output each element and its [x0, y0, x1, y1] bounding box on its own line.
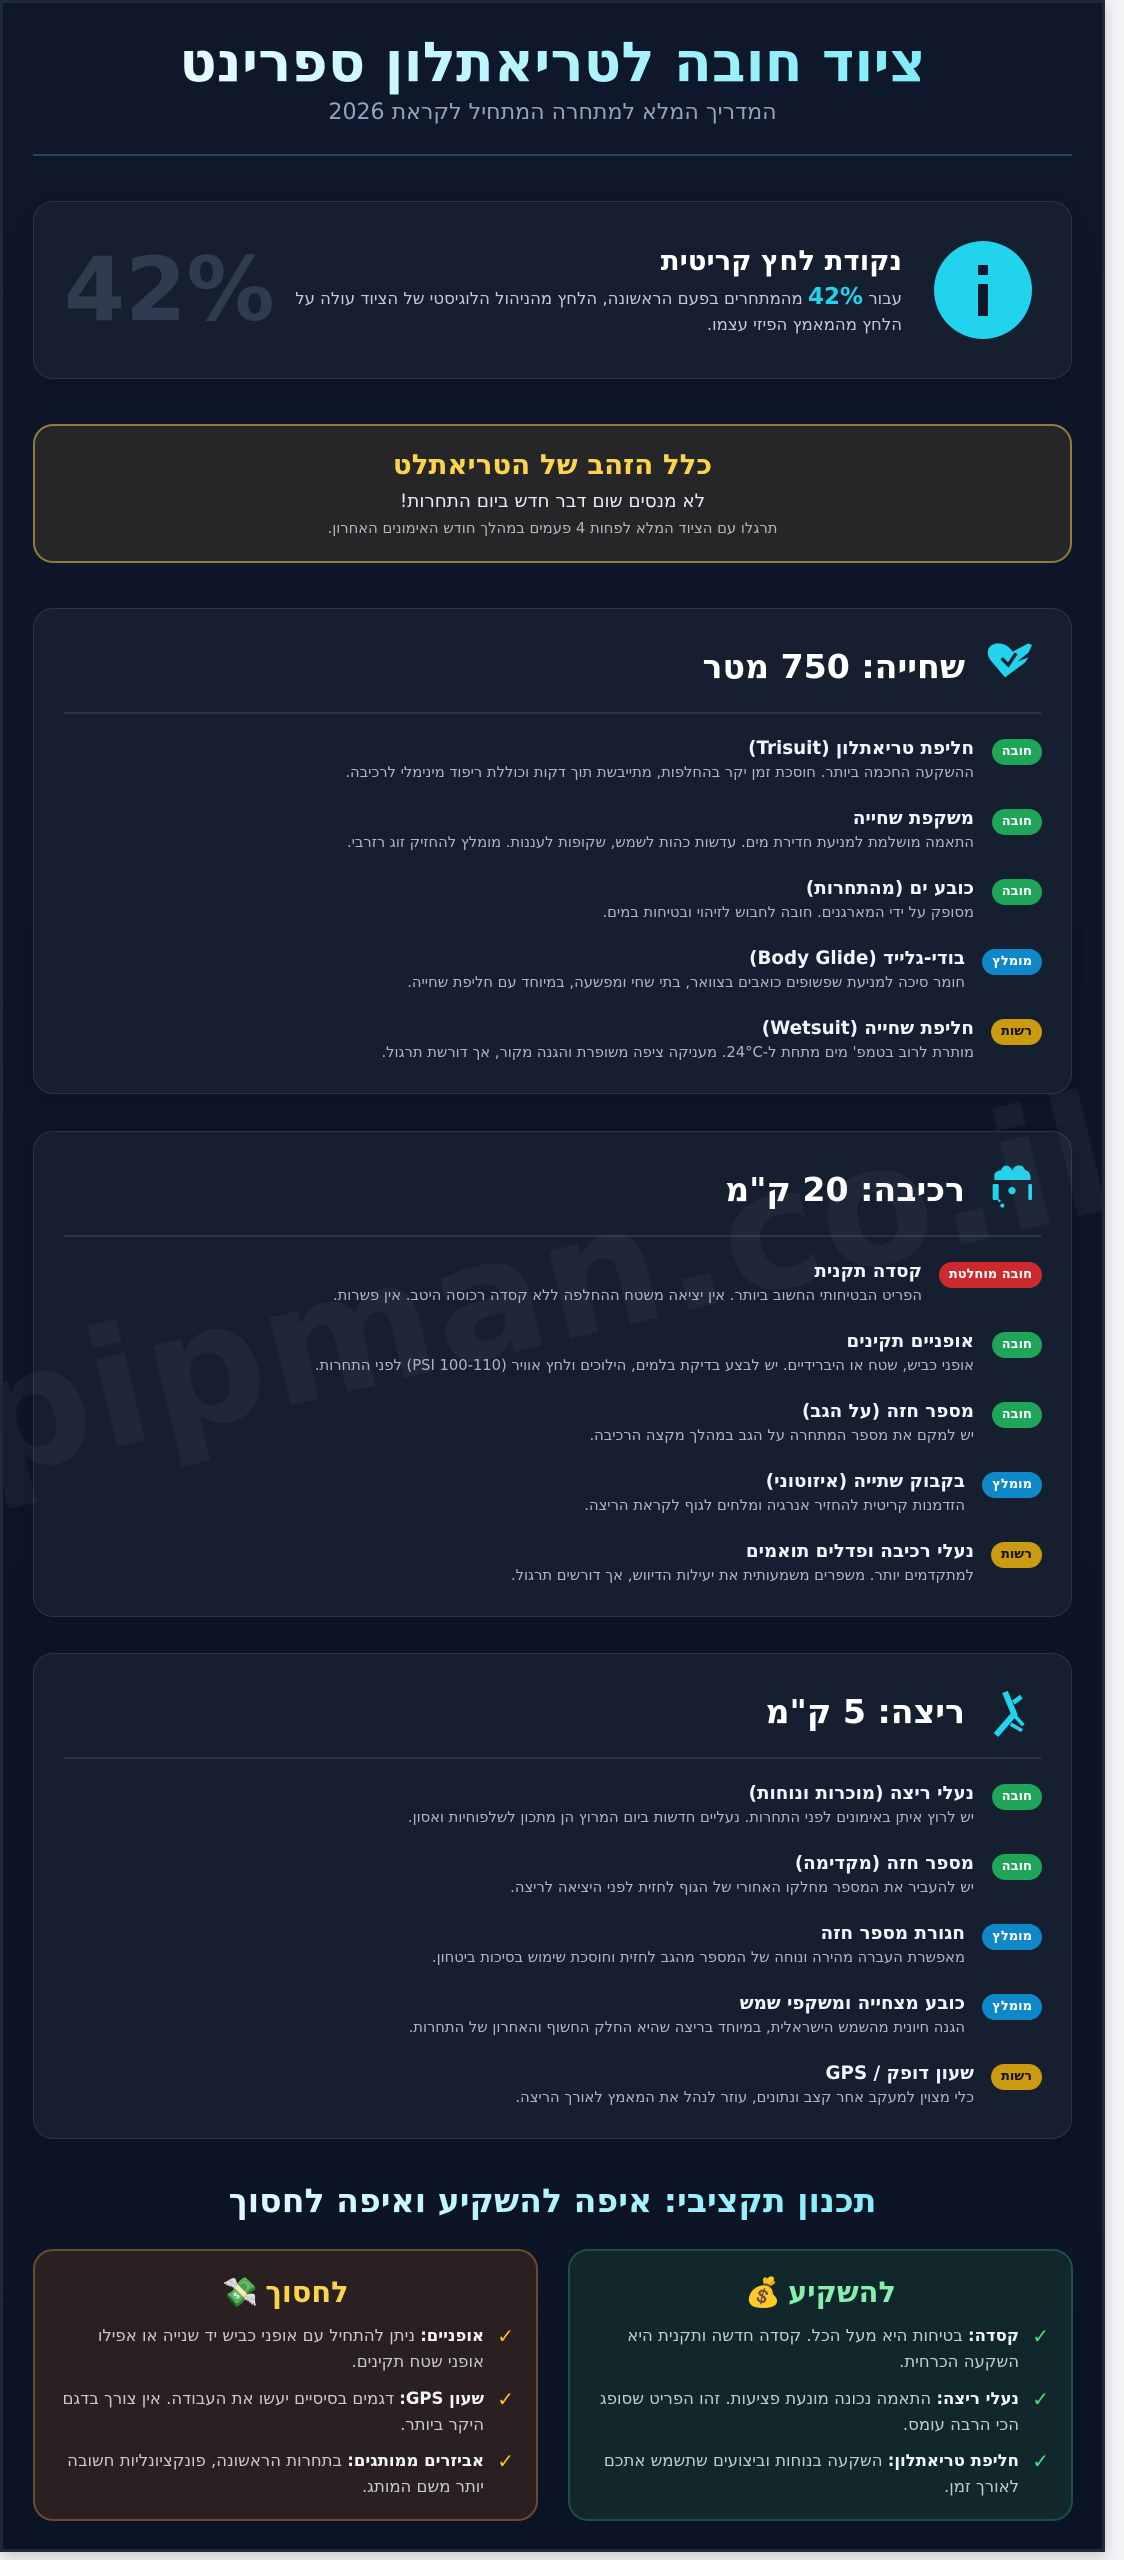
item: water bottle [584, 1471, 1042, 1514]
panel: critical pressure point [33, 201, 1072, 379]
item: wetsuit: רשות [1001, 1024, 1032, 1039]
save item: GPS watch: שעון GPS: דגמים בסיסיים יעשו את העבודה. אין צורך בדגם [62, 2389, 484, 2408]
item: body glide: בודי-גלייד (Body Glide) [749, 948, 965, 969]
item: back race number: מספר חזה (על הגב) [802, 1401, 974, 1422]
item: swim cap [602, 878, 1042, 921]
check mark: ✓ [1032, 2449, 1049, 2473]
item: back race number: יש למקם את מספר המתחרה על הגב במהלך מקצה הרכיבה. [589, 1427, 974, 1444]
invest item: running shoes: הכי הרבה עומס. [903, 2415, 1019, 2434]
panel: run [33, 1653, 1072, 2139]
invest item: helmet: השקעה הכרחית. [899, 2352, 1019, 2371]
save item: GPS watch [62, 2389, 484, 2434]
title: ציוד חובה לטריאתלון ספרינט [179, 31, 926, 95]
save heading: לחסוך 💸 [222, 2275, 349, 2309]
item: cycling shoes [511, 1541, 1042, 1584]
critical point text [295, 284, 902, 334]
item: goggles: חובה [1002, 814, 1032, 829]
item: bicycle: אופני כביש, שטח או היברידיים. יש לבצע בדיקת בלמים, הילוכים ולחץ אוויר (PSI 100-110) לפני התחרות. [315, 1357, 974, 1374]
item: body glide: מומלץ [992, 954, 1032, 969]
item: goggles: התאמה מושלמת למניעת חדירת מים. עדשות כהות לשמש, שקופות לעננות. מומלץ להחזיק זוג רזרבי. [347, 834, 974, 851]
item: helmet: הפריט הבטיחותי החשוב ביותר. אין יציאה משטח ההחלפה ללא קסדה רכוסה היטב. אין פשרות. [333, 1287, 922, 1304]
golden rule main line: לא מנסים שום דבר חדש ביום התחרות! [400, 491, 705, 512]
item: front race number [510, 1853, 1042, 1896]
item: goggles: משקפת שחייה [853, 808, 974, 829]
item: water bottle: הזדמנות קריטית להחזיר אנרגיה ומלחים לגוף לקראת הריצה. [584, 1497, 965, 1514]
save item: bicycle [98, 2326, 484, 2371]
item: trisuit: חליפת טריאתלון (Trisuit) [748, 738, 974, 759]
critical point text: הלחץ מהמאמץ הפיזי עצמו. [707, 315, 902, 334]
item: cycling shoes: נעלי רכיבה ופדלים תואמים [746, 1541, 974, 1562]
item: race belt: מומלץ [992, 1929, 1032, 1944]
title [3, 23, 1102, 103]
item: race belt: חגורת מספר חזה [821, 1923, 965, 1944]
item: helmet: קסדה תקנית [814, 1261, 922, 1282]
item: swim cap: חובה [1002, 884, 1032, 899]
item: race belt [432, 1923, 1042, 1966]
item: swim cap: כובע ים (מהתחרות) [806, 878, 974, 899]
item: hat and sunglasses: הגנה חיונית מהשמש הישראלית, במיוחד בריצה שהיא החלק החשוף והאחרון של התחרות. [409, 2019, 965, 2036]
save item: accessories: יותר משם המותג. [362, 2477, 484, 2496]
item: helmet: חובה מוחלטת [949, 1267, 1032, 1282]
save item: accessories: אביזרים ממותגים: בתחרות הראשונה, פונקציונליות חשובה [67, 2451, 484, 2470]
check mark: ✓ [1032, 2324, 1049, 2348]
item: cycling shoes: למתקדמים יותר. משפרים משמעותית את יעילות הדיווש, אך דורשים תרגול. [511, 1567, 974, 1584]
item: front race number: יש להעביר את המספר מחלקו האחורי של הגוף לחזית לפני היציאה לריצה. [510, 1879, 974, 1896]
critical point heading: נקודת לחץ קריטית [661, 244, 902, 277]
item: wetsuit: חליפת שחייה (Wetsuit) [762, 1018, 974, 1039]
swim heading: שחייה: 750 מטר [702, 647, 965, 686]
item: body glide [407, 948, 1042, 991]
panel: swim [33, 608, 1072, 1094]
item: hat and sunglasses: כובע מצחייה ומשקפי שמש [740, 1993, 965, 2014]
item: trisuit: ההשקעה החכמה ביותר. חוסכת זמן יקר בהחלפות, מתייבשת תוך דקות וכוללת ריפוד מינימלי לרכיבה. [345, 764, 974, 781]
item: wetsuit: מותרת לרוב בטמפ' מים מתחת ל-24°C. מעניקה ציפה משופרת והגנה מקור, אך דורשת תרגול. [381, 1044, 974, 1061]
save item: bicycle: אופני שטח תקינים. [351, 2352, 484, 2371]
save item: GPS watch: היקר ביותר. [400, 2415, 484, 2434]
item: running shoes: יש לרוץ איתן באימונים לפני התחרות. נעליים חדשות ביום המרוץ הן מתכון לשלפוחיות ואסון. [408, 1809, 974, 1826]
invest item: running shoes [600, 2389, 1019, 2434]
item: bicycle: אופניים תקינים [847, 1331, 974, 1352]
item: back race number [589, 1401, 1042, 1444]
invest item: running shoes: נעלי ריצה: התאמה נכונה מונעת פציעות. זהו הפריט שסופג [600, 2389, 1019, 2408]
check mark: ✓ [1032, 2387, 1049, 2411]
item: front race number: מספר חזה (מקדימה) [795, 1853, 974, 1874]
invest item: helmet [627, 2326, 1019, 2371]
large stat 42%: 42% [64, 238, 275, 341]
subtitle: המדריך המלא למתחרה המתחיל לקראת 2026 [328, 99, 777, 125]
item: GPS watch: שעון דופק / GPS [826, 2063, 974, 2084]
item: cycling shoes: רשות [1001, 1547, 1032, 1562]
golden rule note: תרגלו עם הציוד המלא לפחות 4 פעמים במהלך חודש האימונים האחרון. [327, 520, 778, 537]
invest heading: להשקיע 💰 [745, 2275, 896, 2309]
check mark: ✓ [497, 2387, 514, 2411]
item: hat and sunglasses [409, 1993, 1042, 2036]
budget heading: תכנון תקציבי: איפה להשקיע ואיפה לחסוך [229, 2181, 876, 2220]
item: hat and sunglasses: מומלץ [992, 1999, 1032, 2014]
bike heading: רכיבה: 20 ק"מ [725, 1170, 965, 1209]
item: running shoes [408, 1783, 1042, 1826]
invest item: helmet: קסדה: בטיחות היא מעל הכל. קסדה חדשה ותקנית היא [627, 2326, 1019, 2345]
item: GPS watch: רשות [1001, 2069, 1032, 2084]
item: bicycle [315, 1331, 1042, 1374]
item: water bottle: מומלץ [992, 1477, 1032, 1492]
item: body glide: חומר סיכה למניעת שפשופים כואבים בצוואר, בתי שחי ומפשעה, במיוחד עם חליפת שחייה. [407, 974, 965, 991]
panel: save [33, 2249, 538, 2521]
item: front race number: חובה [1002, 1859, 1032, 1874]
item: back race number: חובה [1002, 1407, 1032, 1422]
budget heading [3, 2178, 1102, 2224]
item: running shoes: נעלי ריצה (מוכרות ונוחות) [749, 1783, 974, 1804]
item: trisuit [345, 738, 1042, 781]
item: race belt: מאפשרת העברה מהירה ונוחה של המספר מהגב לחזית וחוסכת שימוש בסיכות ביטחון. [432, 1949, 965, 1966]
panel: golden rule [33, 424, 1072, 563]
item: wetsuit [381, 1018, 1042, 1061]
save item: accessories [67, 2451, 484, 2496]
check mark: ✓ [497, 2324, 514, 2348]
item: goggles [347, 808, 1042, 851]
critical point text: עבור 42% מהמתחרים בפעם הראשונה, הלחץ מהניהול הלוגיסטי של הציוד עולה על [295, 284, 902, 310]
icon: swim [988, 643, 1032, 678]
panel: invest [568, 2249, 1073, 2521]
item: GPS watch [515, 2063, 1042, 2106]
invest item: trisuit: לאורך זמן. [944, 2477, 1019, 2496]
golden rule heading: כלל הזהב של הטריאתלט [393, 448, 712, 481]
invest item: trisuit [604, 2451, 1019, 2496]
item: trisuit: חובה [1002, 744, 1032, 759]
save item: bicycle: אופניים: ניתן להתחיל עם אופני כביש יד שנייה או אפילו [98, 2326, 484, 2345]
icon: run [994, 1690, 1025, 1737]
item: running shoes: חובה [1002, 1789, 1032, 1804]
item: water bottle: בקבוק שתייה (איזוטוני) [766, 1471, 965, 1492]
icon: bike [992, 1165, 1032, 1208]
check mark: ✓ [497, 2449, 514, 2473]
invest item: trisuit: חליפת טריאתלון: השקעה בנוחות וביצועים שתשמש אתכם [604, 2451, 1019, 2470]
item: GPS watch: כלי מצוין למעקב אחר קצב ונתונים, עוזר לנהל את המאמץ לאורך הריצה. [515, 2089, 974, 2106]
header divider [33, 154, 1072, 156]
item: bicycle: חובה [1002, 1337, 1032, 1352]
item: swim cap: מסופק על ידי המארגנים. חובה לחבוש לזיהוי ובטיחות במים. [602, 904, 974, 921]
run heading: ריצה: 5 ק"מ [766, 1692, 965, 1731]
panel: bike [33, 1131, 1072, 1617]
icon: info circle [934, 241, 1032, 339]
item: helmet [333, 1261, 1042, 1304]
